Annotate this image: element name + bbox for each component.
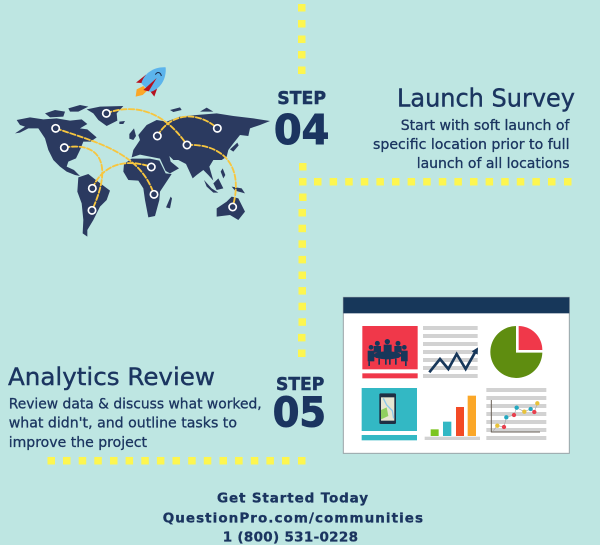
teal phone map panel [362, 388, 417, 440]
step 04 badge: 04 [274, 106, 329, 154]
heading: Analytics Review: Analytics Review [8, 363, 215, 391]
text block: step 04 description [373, 118, 570, 172]
world map with routes [15, 105, 270, 237]
text block: step 05 description: Review data & discuss what worked, [9, 396, 262, 412]
heading: Launch Survey: Launch Survey [397, 84, 575, 113]
browser window [343, 297, 569, 453]
text block: step 04 description: Start with soft launch of [401, 118, 570, 134]
footer call to action: QuestionPro.com/communities [163, 510, 423, 526]
red meeting panel [362, 326, 418, 378]
step 04 badge: STEP [277, 88, 326, 109]
location markers [52, 110, 236, 214]
dashboard illustration [343, 297, 569, 453]
dotted connector: middle vertical [298, 163, 306, 357]
dotted connector: step 04 horizontal [299, 178, 572, 186]
footer call to action: Get Started Today [217, 491, 368, 507]
window header bar [343, 297, 569, 313]
bar chart [425, 396, 480, 440]
text block: step 05 description: improve the project [9, 435, 147, 451]
pie chart [490, 326, 542, 378]
dotted connector: top vertical [298, 4, 306, 74]
text block: step 04 description: launch of all locations [417, 156, 570, 172]
text block: step 05 description [9, 396, 262, 451]
icon: rocket [136, 67, 166, 97]
line graph over text lines [423, 326, 478, 378]
scatter line chart [486, 388, 546, 440]
text block: step 04 description: specific location prior to full [373, 137, 570, 153]
dashed route lines [56, 109, 236, 210]
text block: step 05 description: what didn't, and outline tasks to [9, 416, 237, 432]
step 05 badge: 05 [273, 389, 326, 437]
step 05 badge: STEP [276, 374, 324, 395]
continents [15, 105, 270, 237]
footer call to action [163, 491, 423, 545]
dotted connector: step 05 horizontal [48, 457, 306, 464]
